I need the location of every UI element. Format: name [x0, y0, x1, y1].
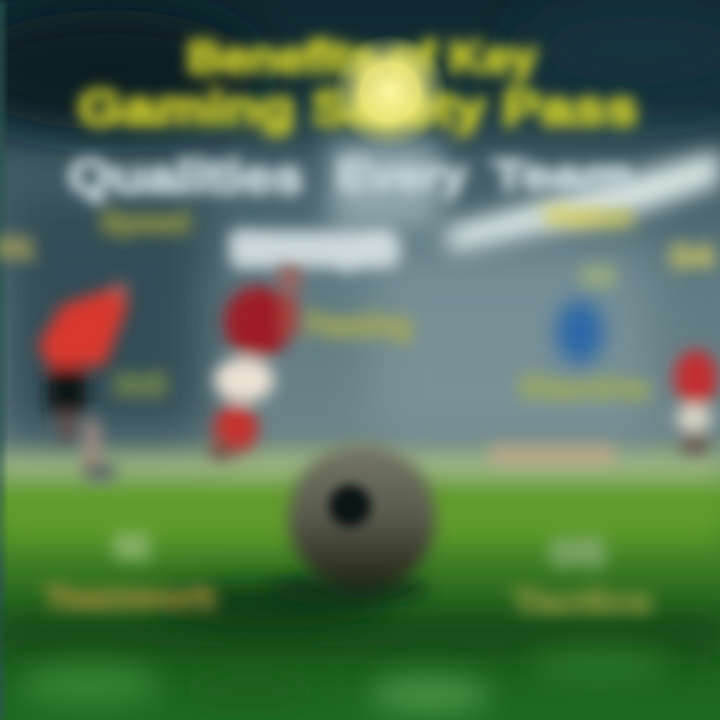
- subtitle: [68, 151, 632, 204]
- player: blue kit right: [556, 300, 604, 364]
- small labels: Stamina: [519, 369, 649, 405]
- subtitle: Every: [337, 151, 468, 200]
- small labels: Speed: [100, 206, 190, 239]
- football: [270, 444, 436, 606]
- light beam: [445, 150, 720, 252]
- lower left caption: 02: [114, 528, 150, 566]
- lower left caption: Teamwork: [44, 579, 216, 615]
- subtitle: Qualities: [68, 151, 304, 204]
- title: Gaming Safety Pass: [78, 80, 638, 136]
- player: dark red kit centre: [208, 266, 302, 460]
- title: [78, 31, 638, 136]
- lower right caption: Tactics: [512, 583, 652, 619]
- distant advertising board: [490, 444, 615, 466]
- player: red kit left: [38, 282, 128, 481]
- lower right caption: 05: [550, 531, 606, 575]
- small labels: Passing: [304, 306, 412, 344]
- lower left caption: [44, 528, 216, 615]
- floodlight glow: [332, 34, 448, 150]
- player: red kit far right: [674, 350, 718, 454]
- subtitle: Team: [492, 151, 632, 200]
- small labels: 03: [581, 261, 615, 292]
- white banner: Strength: [228, 227, 400, 271]
- small labels: Skill: [113, 369, 167, 402]
- lower right caption: [512, 531, 652, 619]
- small labels: 04: [670, 238, 714, 276]
- small labels: Vision: [543, 201, 633, 232]
- small labels: [0, 201, 714, 405]
- title: Benefits of Key: [187, 31, 537, 83]
